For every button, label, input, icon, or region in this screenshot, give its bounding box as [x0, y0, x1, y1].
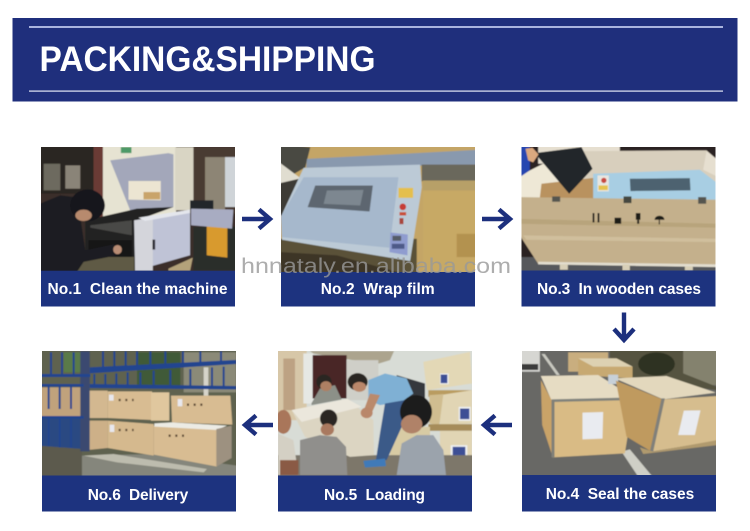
watermark: hnnataly.en.alibaba.com [241, 254, 511, 278]
panel: step 6 delivery [37, 347, 240, 512]
caption bar [41, 271, 235, 306]
caption bar: No.5 Loading [324, 487, 425, 504]
arrow: step 1 to 2 [242, 210, 270, 228]
title: PACKING&SHIPPING [40, 40, 376, 79]
photo: machine in wooden crate [522, 147, 716, 270]
caption bar: No.4 Seal the cases [546, 486, 694, 503]
arrow: step 3 to 4 [614, 312, 634, 340]
caption bar [42, 476, 236, 512]
caption bar [281, 272, 475, 306]
panel: step 2 wrap film [277, 144, 480, 306]
arrow: step 2 to 3 [482, 210, 510, 228]
caption bar [522, 475, 716, 512]
arrow: step 4 to 5 [484, 416, 512, 434]
caption bar: No.2 Wrap film [321, 281, 435, 298]
photo: sealed crates on road [522, 351, 716, 475]
caption bar [522, 270, 716, 306]
photo: worker cleaning laser machine [41, 147, 235, 271]
photo: machine wrapped in film [281, 147, 475, 272]
caption bar [278, 476, 472, 512]
photo: crates on a blue truck [42, 351, 236, 476]
header banner [12, 18, 738, 102]
panel: step 5 loading [273, 347, 477, 512]
caption bar: No.3 In wooden cases [537, 281, 701, 298]
panel: step 1 clean the machine [37, 144, 240, 306]
panel: step 3 in wooden cases [516, 144, 720, 306]
arrow: step 5 to 6 [245, 416, 273, 434]
photo: workers loading crate [278, 351, 472, 476]
caption bar: No.1 Clean the machine [48, 281, 228, 298]
panel: step 4 seal the cases [516, 347, 720, 512]
caption bar: No.6 Delivery [88, 487, 189, 504]
